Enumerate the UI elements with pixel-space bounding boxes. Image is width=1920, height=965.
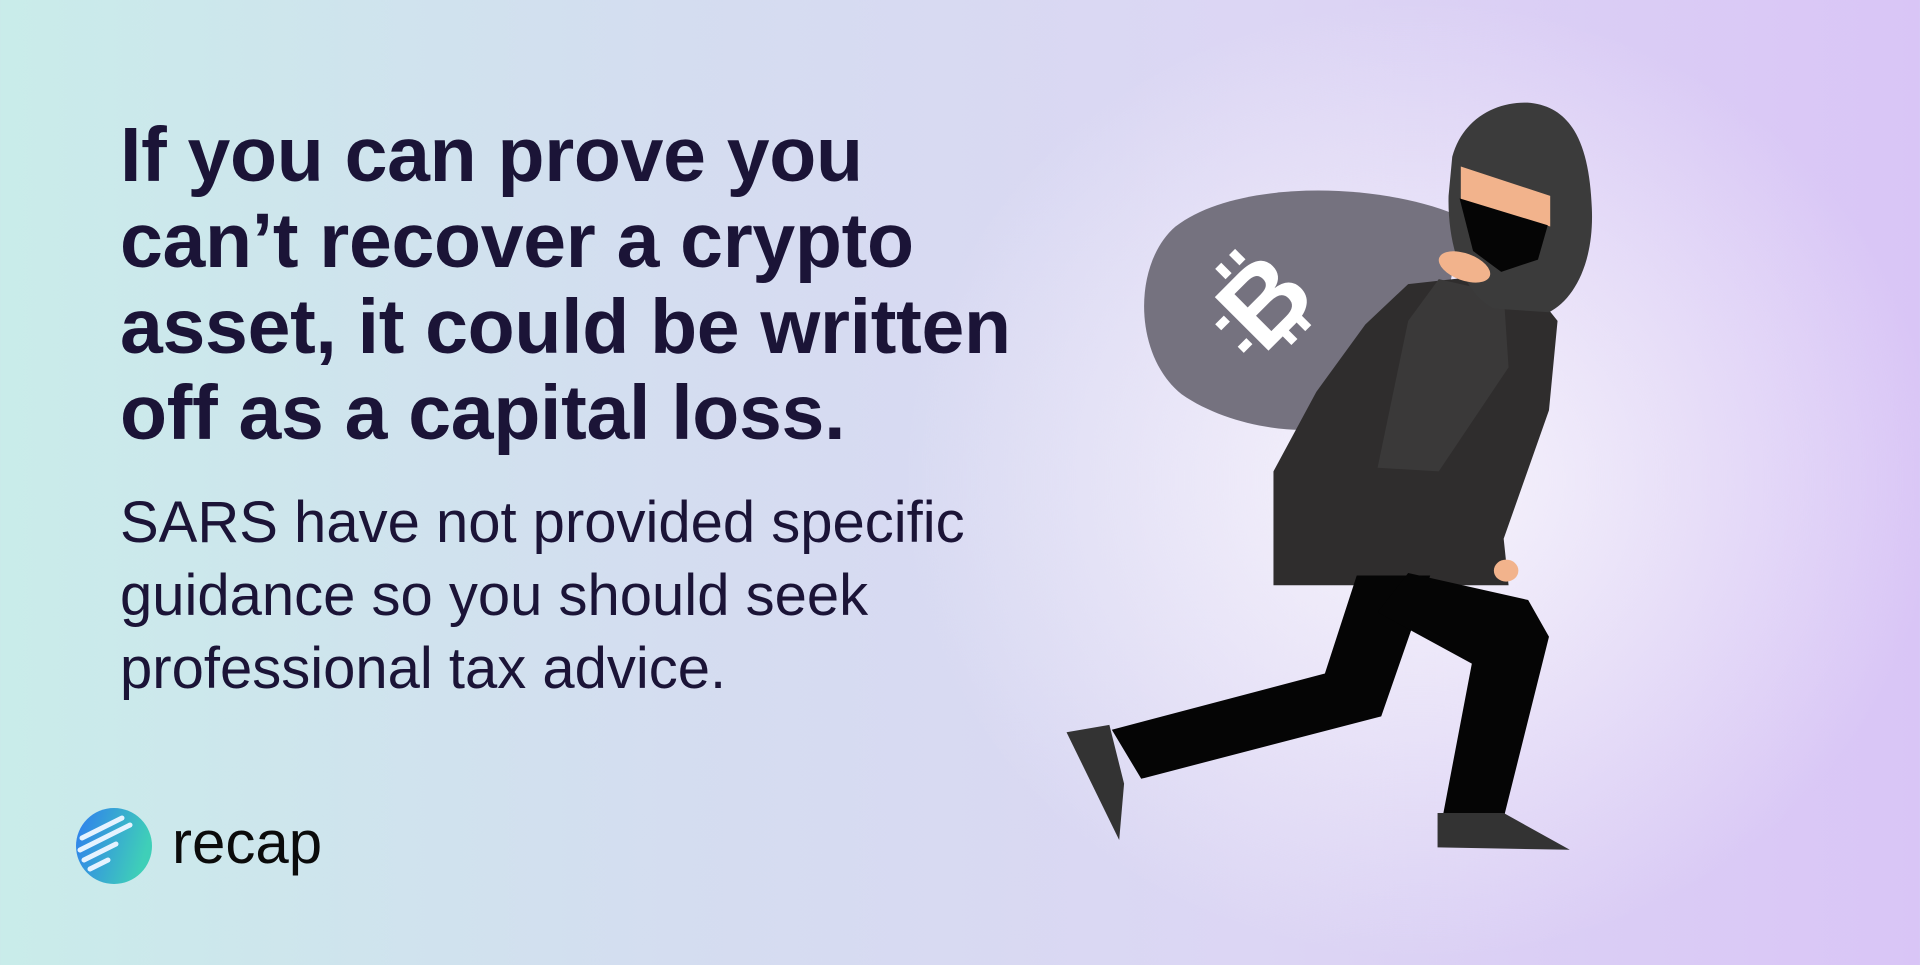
torso (1273, 272, 1558, 585)
bag (1144, 191, 1463, 430)
front shoe (1438, 813, 1570, 850)
body text (120, 490, 965, 701)
back shoe (1067, 725, 1124, 840)
logo: recap (76, 808, 322, 884)
front leg (1378, 573, 1549, 818)
logo text: recap (172, 809, 322, 876)
mask (1460, 198, 1548, 272)
face skin (1461, 167, 1550, 227)
icon: logo circle (76, 808, 152, 884)
hand (1435, 245, 1494, 289)
icon: bitcoin: B (1193, 230, 1336, 373)
right hand (1494, 560, 1518, 582)
back leg (1112, 576, 1430, 779)
title: can’t recover a crypto (120, 198, 914, 284)
title: asset, it could be written (120, 284, 1011, 370)
body text: SARS have not provided specific (120, 490, 965, 555)
title: off as a capital loss. (120, 370, 845, 456)
title (120, 112, 1011, 456)
body text: professional tax advice. (120, 636, 726, 701)
body text: guidance so you should seek (120, 563, 868, 628)
title: If you can prove you (120, 112, 863, 198)
arm (1378, 279, 1509, 471)
hood (1449, 103, 1592, 312)
